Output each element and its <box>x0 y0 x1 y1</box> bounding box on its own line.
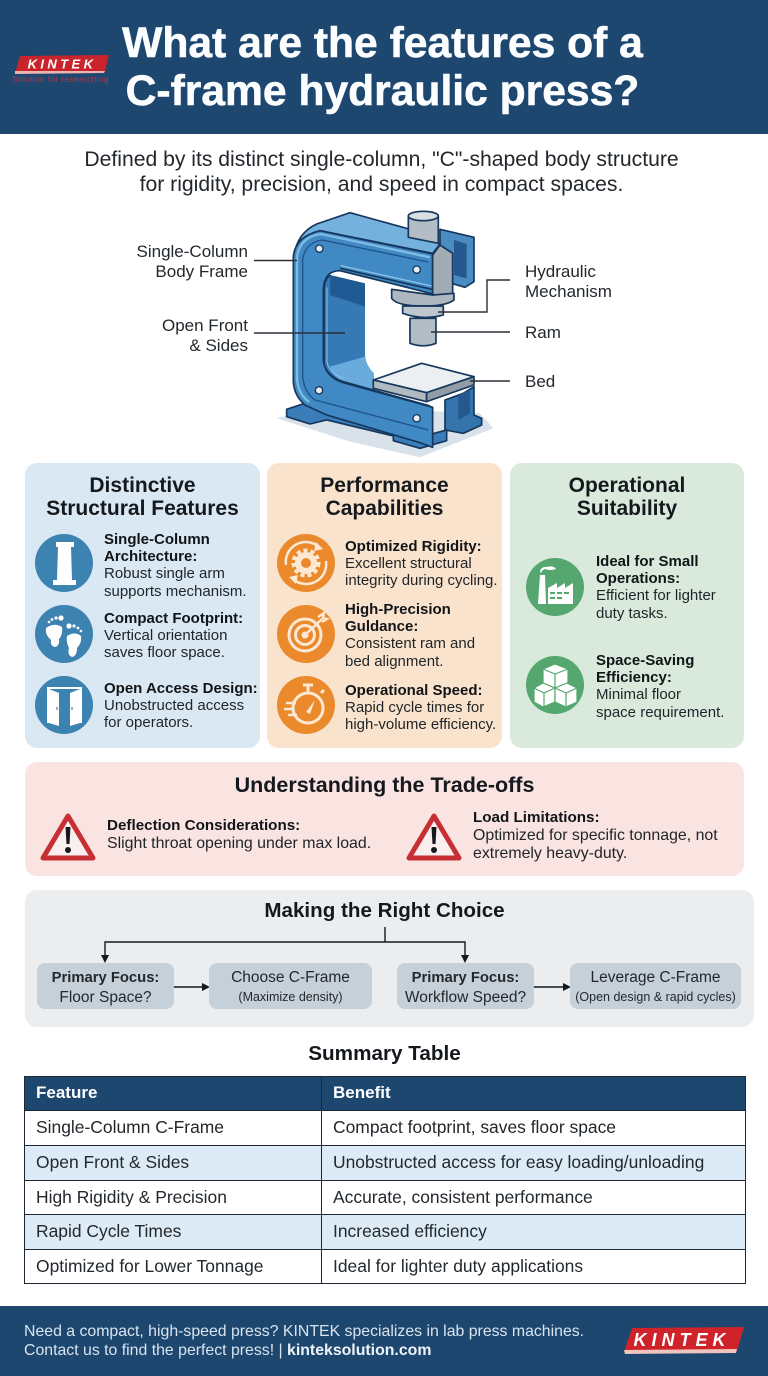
feature: Ideal for Small Operations <box>526 553 716 622</box>
panel: Understanding the Trade-offs <box>25 762 744 876</box>
heading <box>569 474 685 520</box>
call to action: Need a compact, high-speed press? KINTEK specializes in lab press machines. <box>24 1323 584 1340</box>
feature: Operational Speed <box>277 676 496 734</box>
text: Excellent structural <box>345 555 472 572</box>
row: High Rigidity & Precision: Accurate, consistent performance <box>333 1187 593 1207</box>
heading <box>46 474 239 520</box>
text: Robust single arm <box>104 565 225 582</box>
text <box>596 652 724 721</box>
icon: warning triangle <box>406 812 462 862</box>
heading: Summary Table: Summary Table <box>308 1042 461 1065</box>
text: Space-Saving <box>596 652 694 669</box>
text: Slight throat opening under max load. <box>107 835 371 852</box>
trade-off: Load Limitations <box>406 809 718 862</box>
box: Primary Focus Workflow Speed <box>397 963 534 1009</box>
box: Choose C-Frame <box>209 963 372 1009</box>
row: Single-Column C-Frame: Single-Column C-Frame <box>36 1117 224 1137</box>
panel: Performance Capabilities <box>267 463 502 748</box>
subtitle <box>84 148 679 196</box>
panel: Operational Suitability <box>510 463 744 748</box>
row: High Rigidity & Precision <box>24 1180 746 1215</box>
table header <box>24 1076 746 1110</box>
label: Single-Column Body Frame: Single-Column <box>136 242 248 261</box>
summary table <box>24 1076 746 1284</box>
label: Ram: Ram <box>525 323 561 342</box>
trade-off: Deflection Considerations <box>40 814 371 860</box>
logo: KINTEK: KINTEK <box>28 56 96 72</box>
row: Single-Column C-Frame <box>24 1110 746 1145</box>
text: Architecture: <box>104 548 197 565</box>
heading: Performance <box>320 474 449 497</box>
label: Open Front & Sides <box>162 316 248 355</box>
text: duty tasks. <box>596 605 668 622</box>
text: Vertical orientation <box>104 627 227 644</box>
heading: Suitability <box>577 497 677 520</box>
text: Optimized for specific tonnage, not <box>473 827 718 844</box>
title: C-frame hydraulic press? <box>126 67 639 115</box>
panel: Making the Right Choice <box>25 890 754 1027</box>
heading: Distinctive <box>89 474 196 497</box>
text: Efficient for lighter <box>596 587 716 604</box>
box: Leverage C-Frame <box>570 963 741 1009</box>
row: Open Front & Sides: Open Front & Sides <box>36 1152 189 1172</box>
row: Optimized for Lower Tonnage <box>24 1249 746 1284</box>
call to action: Contact us to find the perfect press! | kinteksolution.com <box>24 1342 431 1359</box>
text <box>104 531 247 600</box>
text: Compact Footprint: <box>104 610 243 627</box>
text: Deflection Considerations: <box>107 817 300 834</box>
icon: footprints <box>35 605 93 663</box>
heading <box>320 474 449 520</box>
feature: Compact Footprint <box>35 605 243 663</box>
text: Optimized Rigidity: <box>345 538 482 555</box>
feature: High-Precision Guidance <box>277 601 475 670</box>
diagram: C-frame press with labels <box>136 210 612 458</box>
text <box>107 817 371 852</box>
call to action <box>24 1322 584 1360</box>
title: What are the features of a <box>122 19 643 67</box>
box: Primary Focus Workflow Speed: Primary Focus: <box>412 970 519 986</box>
title <box>122 19 644 115</box>
icon: stopwatch <box>277 676 335 734</box>
heading: Understanding the Trade-offs <box>235 773 534 797</box>
text: Single-Column <box>104 531 210 548</box>
footer band <box>0 1306 768 1376</box>
row: Open Front & Sides: Unobstructed access for easy loading/unloading <box>333 1152 704 1172</box>
logo: KINTEK: Solution for researching <box>12 74 109 84</box>
row: Single-Column C-Frame: Compact footprint, saves floor space <box>333 1117 616 1137</box>
subtitle: Defined by its distinct single-column, "C"-shaped body structure <box>84 148 679 171</box>
heading: Capabilities <box>326 497 443 520</box>
feature: Optimized Rigidity <box>277 534 498 592</box>
table header: Benefit <box>333 1083 391 1102</box>
text: Operations: <box>596 570 680 587</box>
icon: column <box>35 534 93 592</box>
row: High Rigidity & Precision: High Rigidity & Precision <box>36 1187 227 1207</box>
flow arrows <box>25 890 754 1027</box>
label: Hydraulic Mechanism: Hydraulic <box>525 262 596 281</box>
label: Hydraulic Mechanism <box>525 262 612 301</box>
row: Rapid Cycle Times: Increased efficiency <box>333 1221 487 1241</box>
text: extremely heavy-duty. <box>473 845 627 862</box>
icon: target <box>277 605 335 663</box>
row: Optimized for Lower Tonnage: Ideal for lighter duty applications <box>333 1256 583 1276</box>
text <box>473 809 718 863</box>
text: integrity during cycling. <box>345 572 498 589</box>
row: Optimized for Lower Tonnage: Optimized for Lower Tonnage <box>36 1256 263 1276</box>
icon: warning triangle <box>40 814 96 860</box>
feature: Single-Column Architecture <box>35 531 247 600</box>
logo: KINTEK: KINTEK <box>634 1330 730 1350</box>
feature: Open Access Design <box>35 676 258 734</box>
illustration: C-frame press <box>277 210 494 458</box>
heading: Operational <box>569 474 685 497</box>
row: Rapid Cycle Times: Rapid Cycle Times <box>36 1221 181 1241</box>
leader lines <box>254 260 510 382</box>
label: Single-Column Body Frame <box>136 242 248 281</box>
text: saves floor space. <box>104 644 225 661</box>
text: Operational Speed: <box>345 682 483 699</box>
label: Open Front & Sides: Open Front <box>162 316 248 335</box>
box: Choose C-Frame: Choose C-Frame <box>231 969 350 986</box>
panel: Distinctive Structural Features <box>25 463 260 748</box>
text: high-volume efficiency. <box>345 716 496 733</box>
column divider <box>321 1076 322 1283</box>
table outline <box>24 1076 746 1284</box>
feature: Space-Saving Efficiency <box>526 652 724 721</box>
text: Consistent ram and <box>345 635 475 652</box>
text: for operators. <box>104 714 193 731</box>
logo: KINTEK <box>622 1325 746 1357</box>
label: Single-Column Body Frame: Body Frame <box>155 262 248 281</box>
text: Guldance: <box>345 618 418 635</box>
box: Primary Focus Workflow Speed: Workflow Speed? <box>405 989 526 1006</box>
text <box>345 538 498 589</box>
box: Choose C-Frame: (Maximize density) <box>238 990 343 1004</box>
text: supports mechanism. <box>104 583 247 600</box>
label: Open Front & Sides: & Sides <box>189 336 248 355</box>
icon: factory <box>526 558 584 616</box>
text: Unobstructed access <box>104 697 244 714</box>
box: Leverage C-Frame: Leverage C-Frame <box>590 969 721 986</box>
box: Primary Focus Floor Space <box>37 963 174 1009</box>
text: Load Limitations: <box>473 809 600 826</box>
text: Ideal for Small <box>596 553 699 570</box>
logo: KINTEK <box>12 55 109 84</box>
text <box>104 610 243 661</box>
icon: gear with arrows <box>277 534 335 592</box>
text: High-Precision <box>345 601 451 618</box>
heading: Making the Right Choice <box>264 899 505 922</box>
text <box>345 601 475 670</box>
row: Rapid Cycle Times <box>24 1214 746 1249</box>
header band <box>0 0 768 134</box>
text: Rapid cycle times for <box>345 699 484 716</box>
table header: Feature <box>36 1083 97 1102</box>
text: space requirement. <box>596 704 724 721</box>
box: Primary Focus Floor Space: Floor Space? <box>59 989 152 1006</box>
text <box>104 680 258 731</box>
text: Minimal floor <box>596 686 681 703</box>
heading: Structural Features <box>46 497 239 520</box>
text <box>596 553 716 622</box>
text <box>345 682 496 733</box>
text: Efficiency: <box>596 669 672 686</box>
label: Bed: Bed <box>525 372 555 391</box>
subtitle: for rigidity, precision, and speed in compact spaces. <box>140 173 623 196</box>
text: bed alignment. <box>345 653 443 670</box>
box: Primary Focus Floor Space: Primary Focus: <box>52 970 159 986</box>
text: Open Access Design: <box>104 680 258 697</box>
label: Hydraulic Mechanism: Mechanism <box>525 282 612 301</box>
icon: open doors <box>35 676 93 734</box>
row: Open Front & Sides <box>24 1145 746 1180</box>
box: Leverage C-Frame: (Open design & rapid cycles) <box>575 990 736 1004</box>
icon: boxes <box>526 656 584 714</box>
